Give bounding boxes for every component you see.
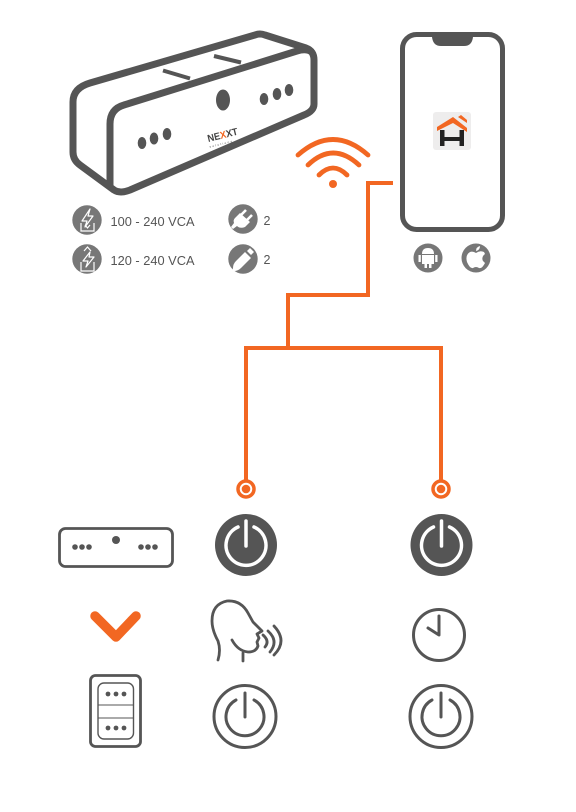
icon: usb [228, 244, 258, 274]
phone [402, 34, 502, 230]
connector lines [246, 183, 441, 482]
brand logo: solutions [209, 139, 234, 149]
text: input voltage: 100 - 240 VCA [110, 215, 195, 229]
socket slots on top [163, 56, 241, 78]
icon: voice command [212, 601, 281, 661]
phone notch [432, 35, 473, 46]
brand logo: NEXXT [206, 127, 239, 145]
icon: outline power button left [214, 686, 276, 748]
central button [216, 90, 230, 110]
power strip device [73, 34, 314, 192]
icon: filled power button right [410, 514, 472, 576]
text: plug count: 2 [264, 214, 270, 228]
connector node: right [433, 481, 449, 497]
icon: android [414, 244, 442, 272]
icon: input voltage [72, 205, 102, 235]
arrow: chevron down [95, 616, 136, 637]
app icon [433, 112, 471, 150]
icon: strip front view [60, 528, 172, 566]
icon: outline power button right [410, 686, 472, 748]
icon: filled power button left [215, 514, 277, 576]
icon: clock [414, 610, 464, 660]
icon: wifi [298, 140, 368, 188]
icon: plug [228, 204, 258, 234]
icon: apple [462, 244, 490, 272]
text: usb count: 2 [264, 253, 270, 267]
text: output voltage: 120 - 240 VCA [110, 254, 195, 268]
icon: wall outlet [90, 676, 140, 746]
right indicator dots [260, 84, 293, 105]
connector node: left [238, 481, 254, 497]
icon: output voltage [72, 244, 102, 274]
left indicator dots [138, 128, 171, 149]
